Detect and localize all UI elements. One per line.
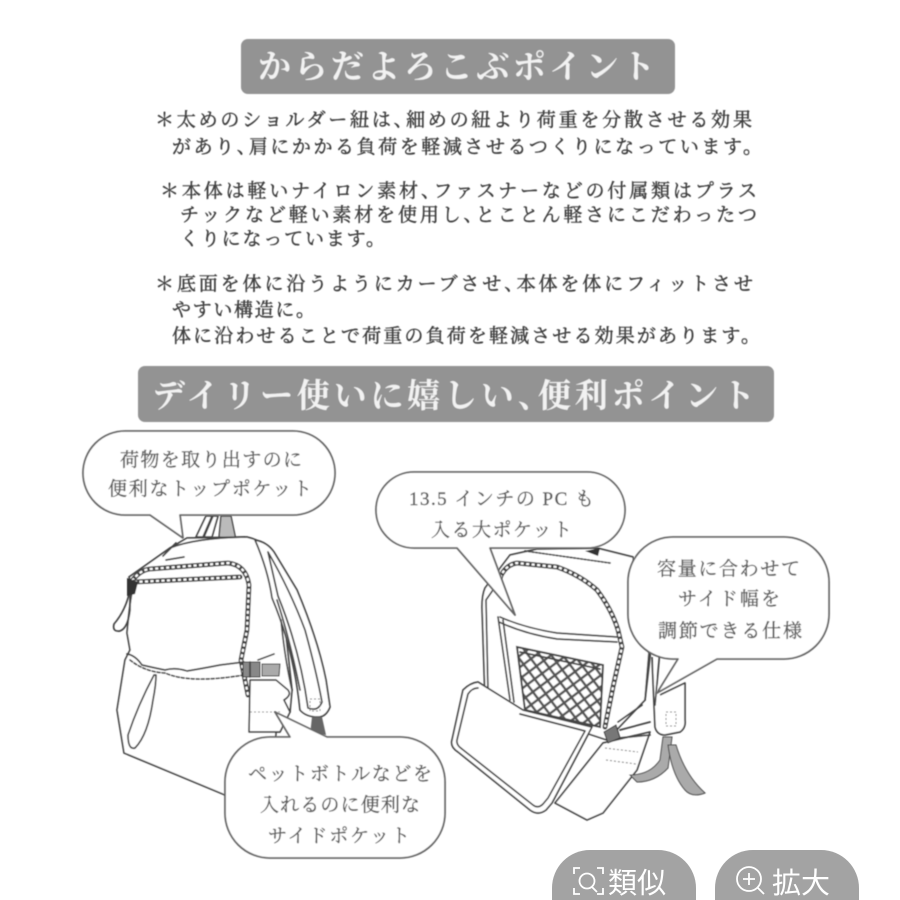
point 2: light materials: くりになっています。 <box>180 228 385 250</box>
front pocket zip <box>132 563 249 695</box>
side buckle <box>243 654 280 677</box>
callout: adjustable side width <box>628 537 829 693</box>
heading banner: everyday convenience points: デイリー使いに嬉しい、便利ポイント <box>152 378 755 415</box>
backpack body outline <box>117 537 292 795</box>
callout: top pocket: 荷物を取り出すのに <box>120 449 302 471</box>
point 1: shoulder straps: ＊太めのショルダー紐は、細めの紐より荷重を分散させる効果 <box>155 109 752 131</box>
side pocket <box>249 680 290 732</box>
zip pull <box>114 590 130 631</box>
top zip <box>170 537 245 548</box>
point 3: curved base: やすい構造に。 <box>172 299 315 321</box>
point 2: light materials: ＊本体は軽いナイロン素材、ファスナーなどの付属類はプラス <box>160 180 757 202</box>
inner pocket edge <box>499 617 617 642</box>
top handle <box>196 516 218 537</box>
illustration: backpack open pocket view <box>452 548 705 820</box>
button: enlarge <box>715 850 859 900</box>
main zip <box>500 563 622 727</box>
callout: large PC pocket <box>376 472 625 615</box>
point 3: curved base: ＊底面を体に沿うようにカーブさせ、本体を体にフィットさせ <box>155 273 753 295</box>
shoulder strap <box>255 540 330 717</box>
illustration: backpack front view <box>114 516 330 795</box>
point 3: curved base: 体に沿わせることで荷重の負荷を軽減させる効果があります。 <box>172 325 760 347</box>
callout: side pocket: ペットボトルなどを <box>248 763 432 785</box>
mesh pocket <box>517 647 603 727</box>
button: enlarge: 拡大 <box>772 867 830 900</box>
point 3: curved base <box>155 273 760 347</box>
top zip <box>525 551 610 563</box>
side pocket stitching <box>605 748 638 764</box>
callout: side pocket: サイドポケット <box>268 826 410 847</box>
shoulder strap <box>652 657 685 735</box>
point 2: light materials <box>160 180 757 250</box>
drawstring gather <box>127 654 244 671</box>
icon: zoom in <box>737 867 764 894</box>
callout: side pocket <box>225 712 445 858</box>
icon: scan magnifier <box>574 868 603 894</box>
open flap pocket <box>452 682 650 820</box>
button: similar search: 類似 <box>608 868 666 900</box>
button: similar search <box>552 850 696 900</box>
callout: adjustable side width: 調節できる仕様 <box>658 620 802 642</box>
point 1: shoulder straps <box>155 109 762 158</box>
callout: side pocket: 入れるのに便利な <box>260 794 420 816</box>
callout: large PC pocket: 13.5 インチの PC も <box>409 489 594 510</box>
text block: three body-friendly points <box>155 109 762 347</box>
heading banner: everyday convenience points <box>138 366 774 422</box>
lower strap end <box>310 717 326 735</box>
callout: adjustable side width: サイド幅を <box>678 588 780 610</box>
point 2: light materials: チックなど軽い素材を使用し、とことん軽さにこだわったつ <box>180 204 757 226</box>
heading banner: body-friendly points: からだよろこぶポイント <box>258 50 655 86</box>
callout: top pocket: 便利なトップポケット <box>108 478 312 500</box>
lower gray straps <box>630 737 705 795</box>
point 1: shoulder straps: があり、肩にかかる負荷を軽減させるつくりになっています。 <box>172 136 762 158</box>
pack body <box>482 548 650 740</box>
heading banner: body-friendly points <box>241 39 675 94</box>
callout: large PC pocket: 入る大ポケット <box>431 519 572 541</box>
back strap <box>277 600 300 690</box>
callout: adjustable side width: 容量に合わせて <box>657 558 800 580</box>
adjuster buckle <box>604 705 650 743</box>
callout: top pocket <box>83 431 335 538</box>
drawstring loop <box>128 675 156 748</box>
